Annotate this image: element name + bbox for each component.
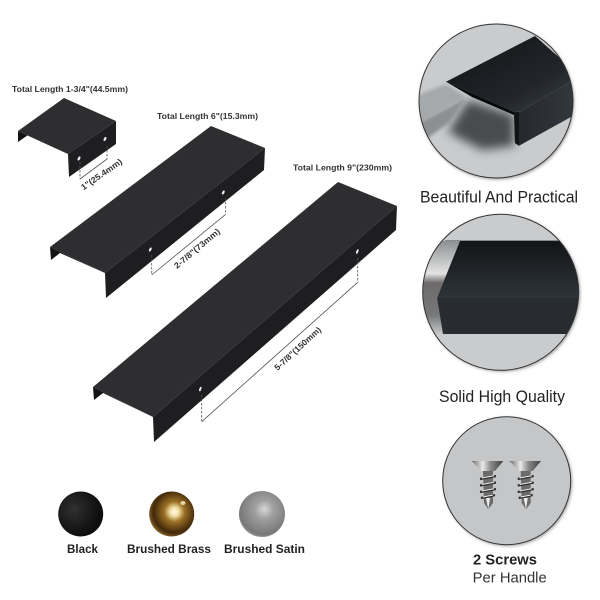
dimension: large handle hole spacing	[202, 258, 358, 422]
finish: brushed brass	[127, 492, 211, 556]
panel: screws	[443, 417, 572, 586]
finish: brushed satin	[224, 491, 305, 556]
panel: solid high quality	[420, 212, 585, 406]
panel: beautiful and practical: Beautiful And Practical	[420, 188, 578, 206]
finish: black: Black	[67, 542, 98, 556]
panel: beautiful and practical	[415, 20, 580, 206]
label: total length medium handle: Total Length 6"(15.3mm)	[157, 111, 258, 121]
icon: screw 1	[472, 461, 503, 509]
small handle	[18, 98, 116, 177]
panel: screws: 2 Screws	[473, 552, 537, 568]
finish: brushed brass: Brushed Brass	[127, 542, 211, 556]
icon: screw 2	[509, 461, 541, 509]
finish: brushed satin: Brushed Satin	[224, 542, 305, 556]
label: total length small handle: Total Length 1-3/4"(44.5mm)	[12, 84, 128, 94]
panel: solid high quality: Solid High Quality	[439, 388, 566, 406]
finish: black	[58, 492, 103, 556]
panel: screws: Per Handle	[473, 570, 547, 586]
large handle	[93, 182, 397, 442]
dimension: medium handle hole spacing: 2-7/8"(73mm)	[172, 226, 222, 271]
label: total length large handle: Total Length 9"(230mm)	[293, 162, 392, 172]
dimension: medium handle hole spacing	[152, 198, 226, 275]
dimension: small handle hole spacing: 1"(25.4mm)	[79, 156, 124, 192]
medium handle	[50, 126, 265, 298]
dimension: large handle hole spacing: 5-7/8"(150mm)	[272, 324, 323, 372]
